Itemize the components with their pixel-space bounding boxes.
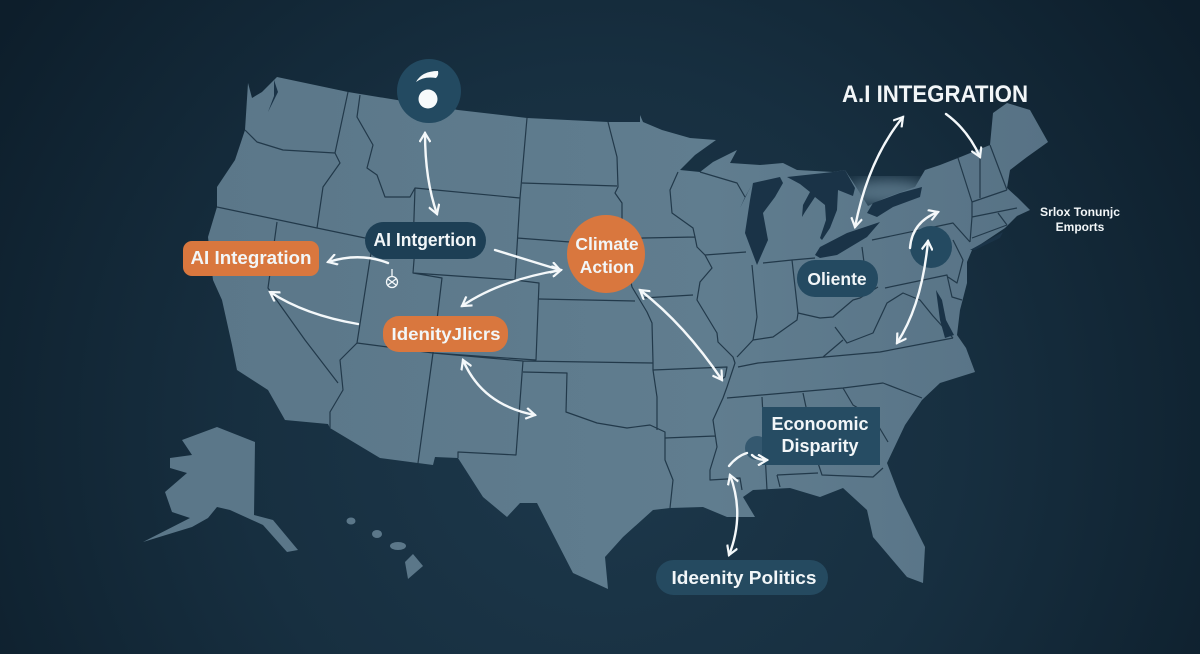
map: Alaska (143, 427, 298, 552)
arrow: to Economic Disparity (752, 455, 767, 460)
icon: Pennsylvania circle (910, 226, 952, 268)
arrow: Climate Action to Identity (462, 270, 561, 306)
arrow: heading to Vermont (946, 114, 980, 157)
state borders: west (217, 92, 673, 508)
label: AI Integration orange (183, 241, 319, 276)
label: Identity Politics pill (656, 560, 828, 595)
label: Climate Action circle: Climate (575, 234, 639, 254)
label: Oliente pill: Oliente (807, 269, 867, 289)
text: side note (1040, 205, 1120, 234)
label: Oliente pill (797, 260, 878, 297)
label: Identity pill orange: IdenityJlicrs (392, 324, 501, 344)
label: AI Integration orange: AI Integration (190, 247, 312, 268)
label: Climate Action circle: Action (580, 257, 634, 277)
arrow: Pennsylvania curved (910, 212, 938, 248)
icon: top circle badge (397, 59, 461, 123)
glow: north of the lakes (846, 179, 930, 205)
label: Economic Disparity (745, 407, 880, 465)
state borders: central and east (622, 145, 1017, 490)
arrow: Pennsylvania to Virginia (897, 241, 928, 343)
arrow: AI pill to Climate Action (495, 250, 560, 270)
arrow: heading to Lake Erie (855, 117, 903, 227)
map: Hawaii (346, 518, 423, 579)
text: side note: Srlox Tonunjc (1040, 205, 1120, 219)
icon: small node (386, 269, 398, 288)
label: Climate Action circle (567, 215, 645, 293)
arrow: Identity to Texas (463, 360, 535, 415)
label: Economic Disparity: Econoomic (772, 414, 868, 434)
great lakes (268, 80, 1003, 338)
arrow: dark pill to orange label (328, 257, 388, 263)
label: Identity Politics pill: Ideenity Politics (672, 568, 816, 588)
map: contiguous United States (208, 77, 1048, 589)
label: AI Integration dark pill (365, 222, 486, 259)
arrow: Climate Action to Arkansas (640, 290, 722, 380)
arrow: California curve (270, 292, 358, 324)
arrow: Mississippi small curve (729, 453, 747, 466)
land outline (208, 77, 1048, 589)
label: AI Integration dark pill: AI Intgertion (374, 230, 476, 250)
text: side note: Emports (1056, 220, 1105, 234)
arrow: Gulf double arrow (729, 475, 737, 555)
arrow: top badge to AI Integration (425, 133, 437, 214)
heading: A.I INTEGRATION: A.I INTEGRATION (842, 81, 1028, 108)
label: Economic Disparity: Disparity (781, 436, 859, 456)
label: Identity pill orange (383, 316, 508, 352)
